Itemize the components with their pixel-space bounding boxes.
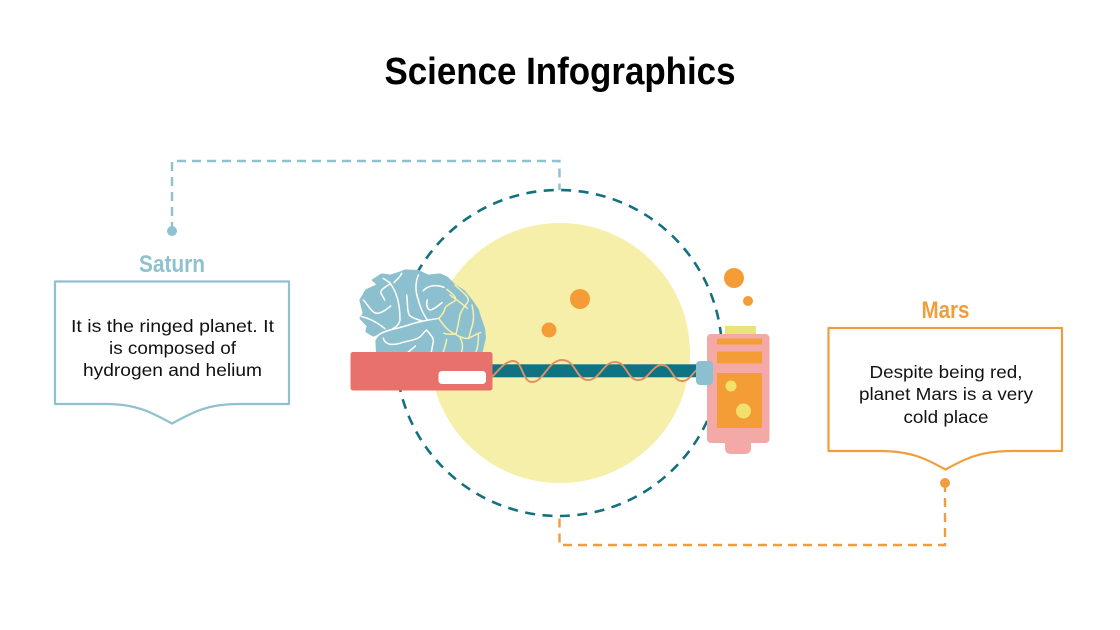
brain folds: yellow — [439, 285, 481, 353]
heading: Saturn: Saturn — [139, 251, 205, 278]
text: Saturn description: It is the ringed planet. It — [71, 316, 274, 336]
text: Mars description: planet Mars is a very — [859, 384, 1033, 404]
text: Mars description: cold place — [904, 407, 988, 427]
dashed orbit ring — [396, 190, 722, 516]
red base block — [350, 352, 492, 390]
connector: Saturn dashed line — [167, 161, 560, 236]
text: Saturn description: hydrogen and helium — [83, 360, 262, 380]
icon: bottle — [707, 326, 770, 454]
tube connector — [696, 361, 713, 385]
tube: teal bar with wave — [490, 360, 702, 382]
orange bubbles above bottle — [724, 268, 753, 306]
yellow central circle — [430, 223, 690, 483]
text: Mars description — [859, 362, 1033, 427]
heading: Mars: Mars — [922, 297, 970, 324]
text: Saturn description: is composed of — [109, 338, 236, 358]
icon: brain — [360, 270, 485, 353]
orange particles in circle — [542, 289, 590, 338]
connector: Mars dashed line — [560, 478, 950, 545]
callout box: Mars — [828, 328, 1062, 470]
callout box: Saturn — [55, 282, 289, 424]
brain folds: white — [362, 273, 444, 352]
title: Science Infographics — [384, 51, 736, 93]
text: Saturn description — [71, 316, 274, 380]
text: Mars description: Despite being red, — [870, 362, 1022, 382]
